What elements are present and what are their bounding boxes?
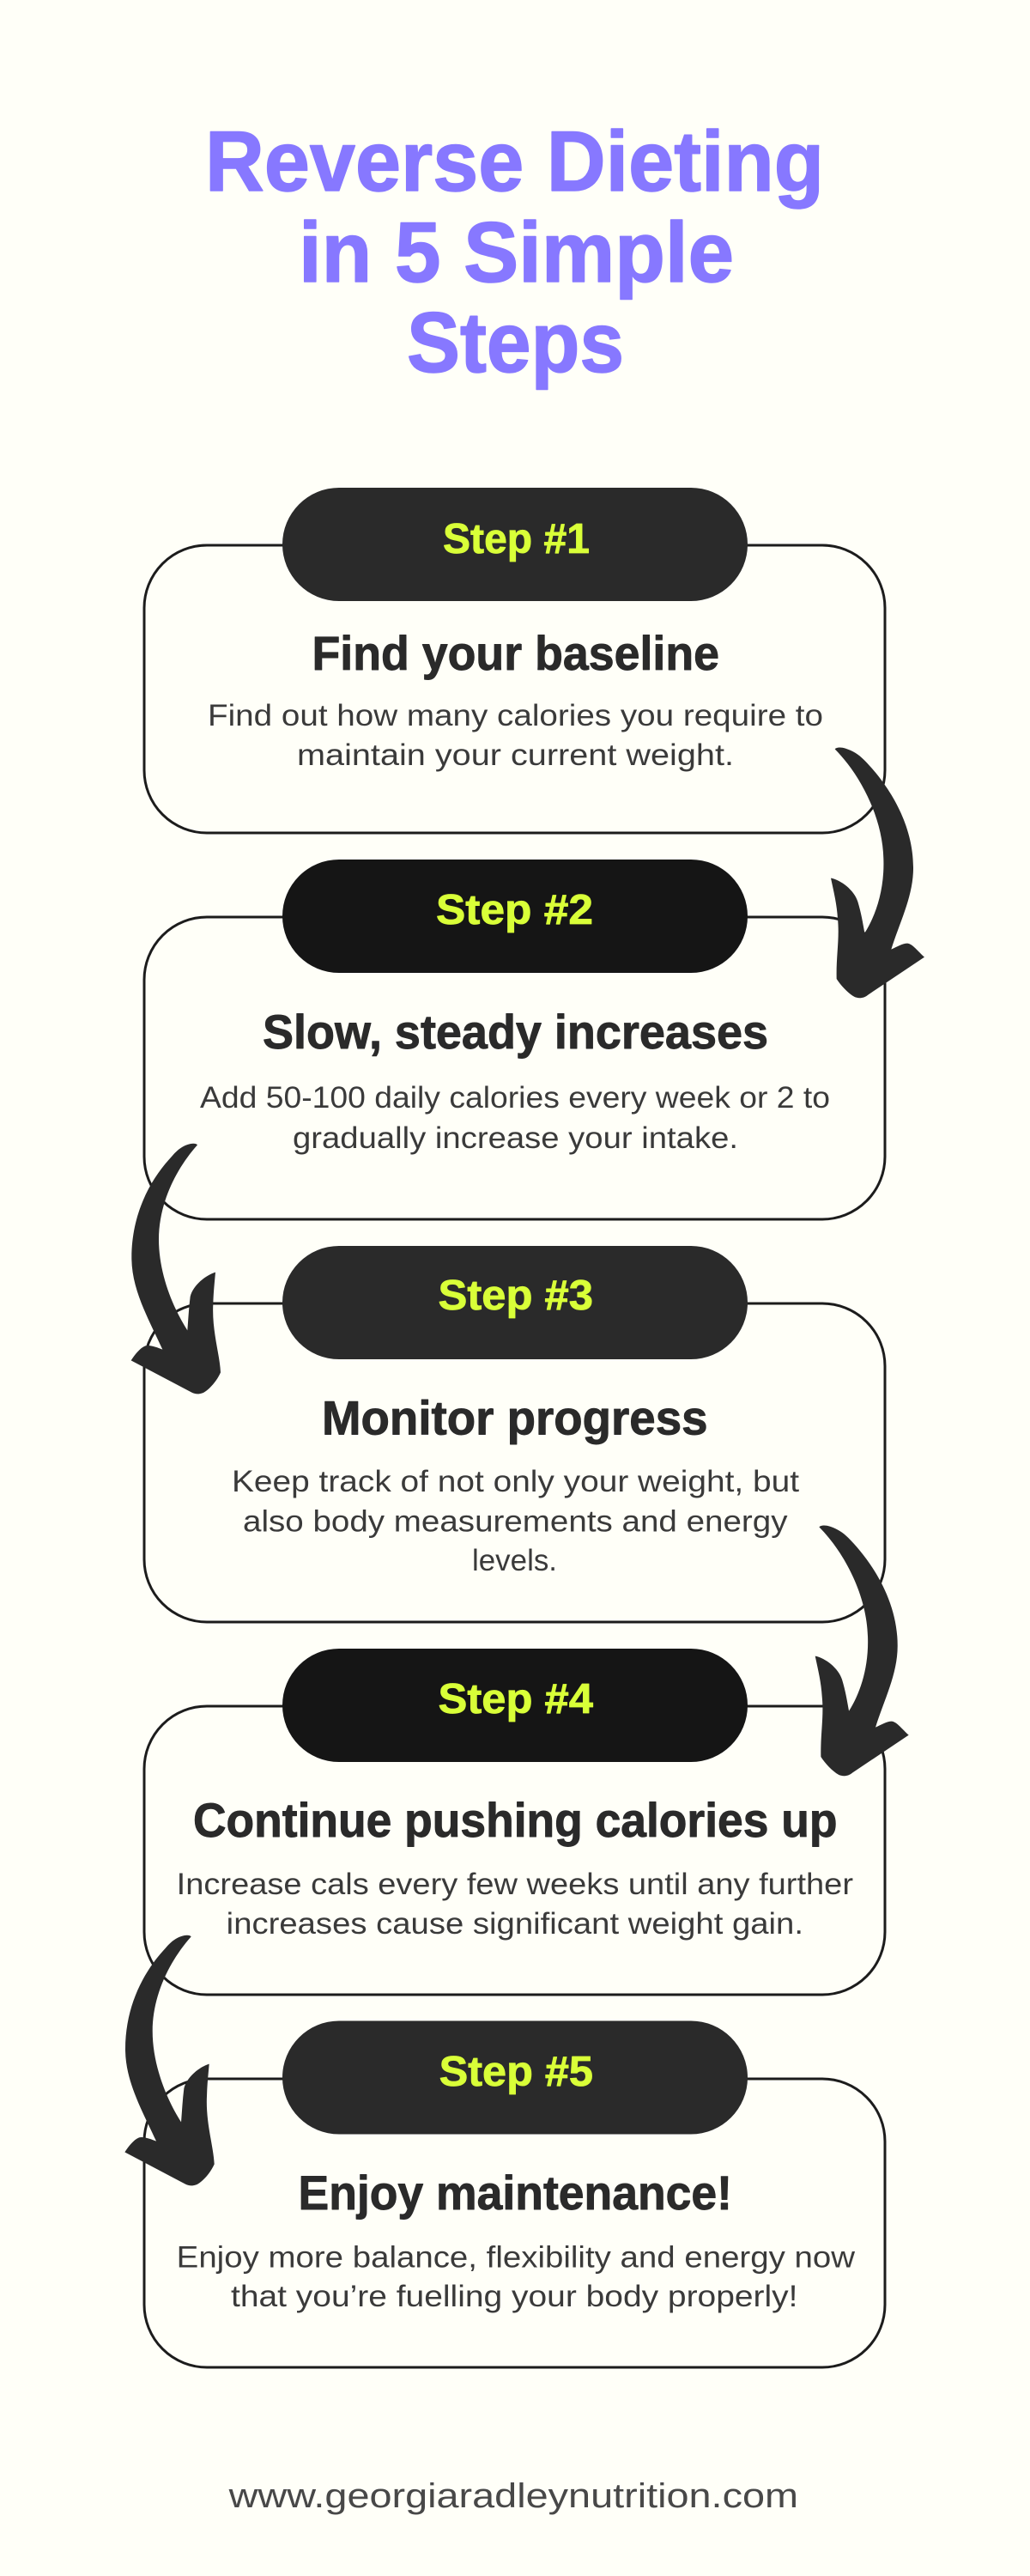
step badge: Step #5 [439, 2049, 593, 2095]
panel: step 2 [144, 860, 885, 1219]
step badge [282, 2021, 748, 2135]
body text: Keep track of not only your weight, but [232, 1465, 799, 1498]
panel: step 4 [144, 1649, 885, 1995]
body text: Enjoy more balance, flexibility and energy now [177, 2241, 856, 2274]
arrow: step 2 to step 3 [131, 1144, 221, 1394]
title: in 5 Simple [299, 204, 734, 300]
heading: Monitor progress [322, 1391, 707, 1444]
step badge [282, 1246, 748, 1359]
card outline [144, 1303, 885, 1622]
panel: step 3 [144, 1246, 885, 1622]
step badge: Step #1 [443, 516, 590, 562]
body text: increases cause significant weight gain. [227, 1907, 803, 1941]
step badge: Step #2 [436, 887, 593, 933]
heading: Slow, steady increases [263, 1005, 768, 1059]
heading: Continue pushing calories up [193, 1793, 838, 1847]
body text [232, 1465, 799, 1577]
body text [177, 2241, 856, 2313]
heading: Find your baseline [312, 626, 719, 680]
body text: Find out how many calories you require to [208, 699, 823, 732]
body text: maintain your current weight. [297, 738, 734, 772]
arrow: step 3 to step 4 [815, 1525, 909, 1776]
body text [200, 1081, 830, 1155]
card outline [144, 1706, 885, 1995]
card outline [144, 2079, 885, 2367]
body text [208, 699, 823, 772]
website footer: www.georgiaradleynutrition.com [227, 2477, 798, 2515]
step badge [282, 1649, 748, 1762]
heading: Enjoy maintenance! [299, 2166, 732, 2220]
title: Steps [407, 295, 624, 390]
body text: Add 50-100 daily calories every week or 2 to [200, 1081, 830, 1115]
title [205, 113, 824, 390]
title: Reverse Dieting [205, 113, 824, 209]
body text: levels. [472, 1544, 557, 1577]
body text: Increase cals every few weeks until any further [177, 1868, 853, 1901]
card outline [144, 917, 885, 1219]
step badge [282, 488, 748, 601]
arrow: step 4 to step 5 [124, 1935, 215, 2185]
step badge: Step #3 [438, 1273, 593, 1319]
arrow: step 1 to step 2 [831, 747, 924, 998]
body text: that you’re fuelling your body properly! [231, 2280, 798, 2313]
card outline [144, 545, 885, 833]
body text: gradually increase your intake. [293, 1121, 738, 1155]
panel: step 5 [144, 2021, 885, 2367]
step badge: Step #4 [438, 1676, 593, 1722]
body text [177, 1868, 853, 1941]
step badge [282, 860, 748, 973]
body text: also body measurements and energy [243, 1504, 788, 1539]
panel: step 1 [144, 488, 885, 833]
